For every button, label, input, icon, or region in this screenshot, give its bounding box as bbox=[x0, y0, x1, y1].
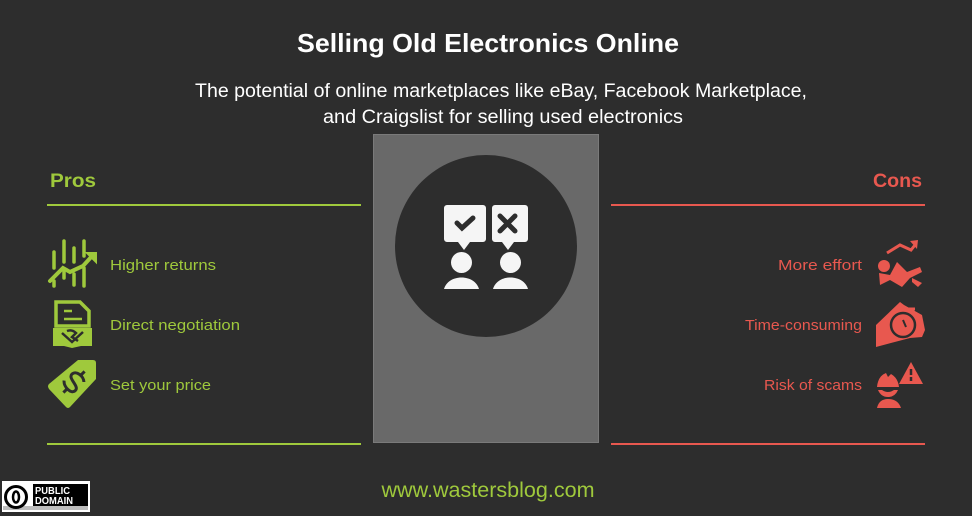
icon: more effort bbox=[878, 240, 922, 287]
title: Selling Old Electronics Online bbox=[297, 28, 679, 58]
badge: public domain: PUBLIC bbox=[35, 486, 70, 497]
website url: www.wastersblog.com bbox=[380, 479, 594, 502]
icon: higher returns chart bbox=[50, 241, 96, 286]
badge: public domain bbox=[2, 481, 90, 512]
text: set your price: Set your price bbox=[110, 377, 211, 394]
icon: check bubble bbox=[444, 205, 486, 250]
icon: price tag bbox=[48, 360, 96, 408]
text: direct negotiation: Direct negotiation bbox=[110, 317, 240, 334]
panel: cons bbox=[611, 171, 925, 445]
icon: right person bbox=[493, 252, 528, 289]
text: more effort: More effort bbox=[778, 257, 863, 274]
icon: time-consuming hand and stopwatch bbox=[876, 302, 925, 347]
icon: cross bubble bbox=[492, 205, 528, 250]
panel: center image bbox=[374, 134, 598, 442]
text: time-consuming: Time-consuming bbox=[745, 317, 862, 334]
badge: public domain: DOMAIN bbox=[35, 496, 73, 507]
heading: pros: Pros bbox=[50, 171, 96, 192]
subtitle bbox=[195, 81, 807, 128]
heading: cons: Cons bbox=[873, 171, 922, 192]
icon: risk of scams worker and warning bbox=[877, 362, 923, 408]
subtitle: and Craigslist for selling used electronics bbox=[323, 107, 683, 128]
text: higher returns: Higher returns bbox=[110, 257, 216, 274]
icon: dark circle with two people and speech bubbles bbox=[395, 155, 577, 337]
panel: pros bbox=[47, 171, 361, 445]
icon: direct negotiation bbox=[53, 302, 92, 348]
text: risk of scams: Risk of scams bbox=[764, 377, 862, 394]
subtitle: The potential of online marketplaces like eBay, Facebook Marketplace, bbox=[195, 81, 807, 102]
icon: left person bbox=[444, 252, 479, 289]
